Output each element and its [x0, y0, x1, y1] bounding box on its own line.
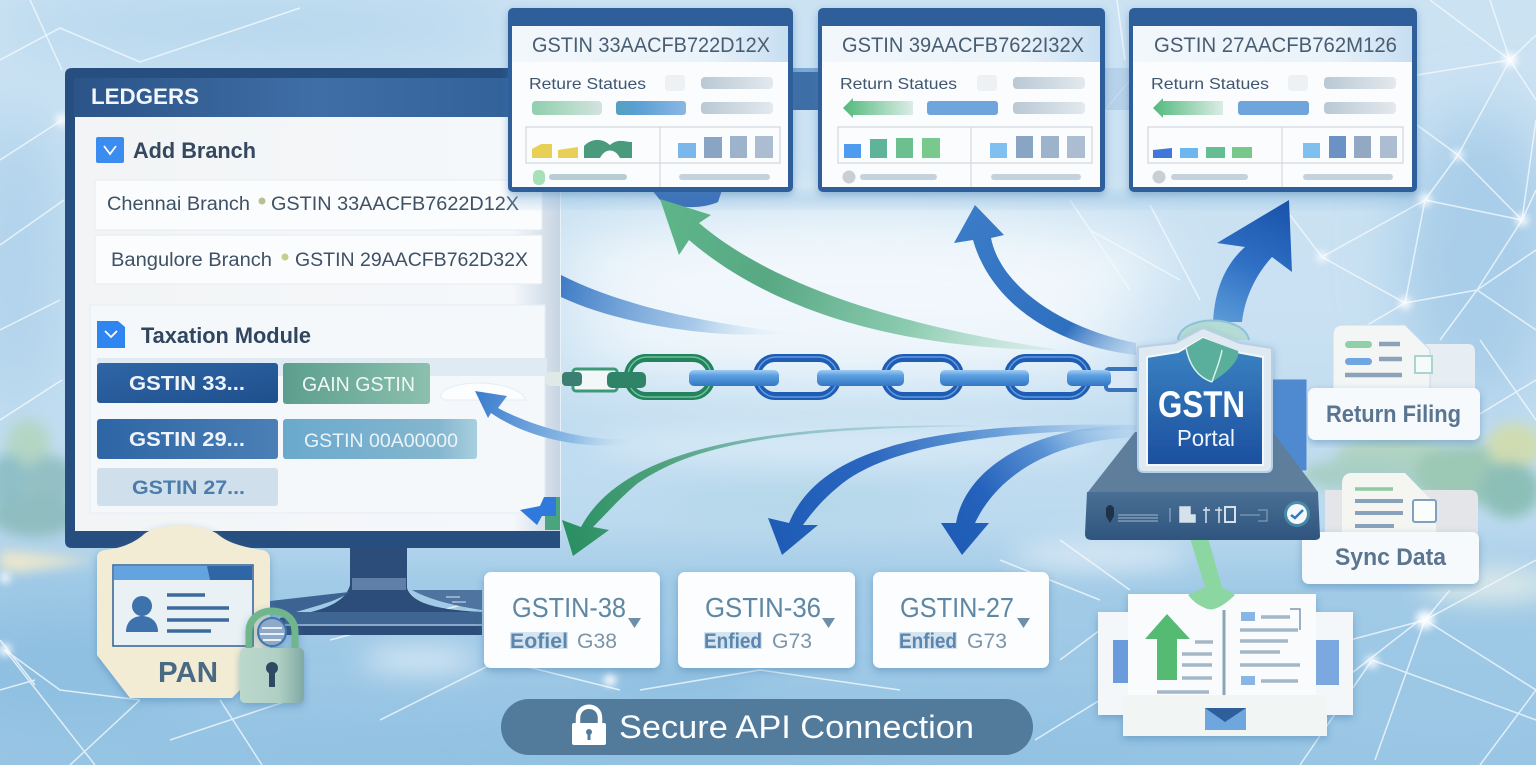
status check	[1284, 501, 1310, 527]
GSTIN-27 tile: GSTIN-27	[900, 592, 1014, 623]
button: GSTIN 33: GSTIN 33...	[129, 373, 245, 395]
return filing stack	[1308, 325, 1480, 440]
folder back	[1420, 344, 1475, 395]
bottom documents stack	[1098, 594, 1353, 736]
shield top ring	[1178, 320, 1249, 340]
icon: envelope	[1205, 708, 1246, 730]
chennai branch row	[95, 180, 542, 230]
tray	[1123, 695, 1327, 736]
status chips	[532, 75, 773, 115]
ledgers header	[74, 78, 564, 117]
GSTIN-36 tile: GSTIN-36	[705, 592, 821, 623]
PAN badge	[97, 526, 270, 698]
GSTIN-36 tile: G73	[772, 630, 812, 653]
card: GSTIN 27	[1129, 8, 1417, 192]
GSTIN-36 tile: Enfied	[704, 630, 762, 653]
card footer	[842, 170, 1081, 184]
arrow: blue down to GSTIN-27	[941, 425, 1136, 555]
arrow: green to first card	[660, 199, 1060, 350]
GSTIN-38 tile	[484, 572, 660, 668]
arrow: blue down to GSTIN-36	[768, 425, 1136, 555]
side panel behind shield	[1270, 379, 1307, 471]
thin connecting links	[573, 369, 1140, 391]
card title: GSTIN 33AACFB722D12X	[532, 34, 770, 57]
card title: GSTIN 27AACFB762M126	[1154, 34, 1397, 57]
small cloud	[440, 383, 526, 400]
button: GAIN GSTIN: GAIN GSTIN	[302, 374, 415, 396]
shield	[1138, 328, 1272, 472]
card: GSTIN 39	[818, 8, 1105, 192]
padlock icon	[240, 611, 304, 703]
arrow: blue to second card	[954, 205, 1136, 355]
button: GSTIN 27: GSTIN 27...	[132, 478, 245, 499]
card status: Reture Statues	[529, 76, 646, 93]
arrow: green down to GSTIN-38	[562, 426, 989, 556]
GSTIN-38 tile: GSTIN-38	[512, 592, 626, 623]
label: Sync Data	[1335, 544, 1447, 571]
label	[1302, 532, 1479, 584]
document	[1342, 473, 1436, 535]
open document	[1128, 594, 1316, 699]
ledgers header: LEDGERS	[91, 84, 199, 109]
monitor stand	[270, 548, 482, 635]
GSTN portal server	[1085, 320, 1320, 540]
GSTIN-27 tile: G73	[967, 630, 1007, 653]
mini charts	[1148, 127, 1403, 187]
button: GSTIN 27	[97, 468, 278, 506]
sync data stack	[1302, 473, 1479, 584]
label: Return Filing	[1326, 401, 1461, 428]
card status: Return Statues	[1151, 76, 1269, 93]
chennai branch row: GSTIN 33AACFB7622D12X	[271, 194, 519, 215]
icon: lock	[572, 707, 606, 745]
mini charts	[526, 127, 780, 187]
mini charts	[838, 127, 1092, 187]
monitor with ledgers screen	[65, 68, 564, 548]
card footer	[1152, 170, 1393, 184]
chennai branch row: Chennai Branch	[107, 194, 250, 215]
GSTN label: GSTN	[1158, 384, 1245, 425]
GSTIN-36 tile	[678, 572, 855, 668]
arrow: blue back to taxation module	[475, 391, 645, 445]
secure API connection pill	[501, 699, 1033, 755]
bangulore branch row	[95, 235, 542, 284]
add branch heading: Add Branch	[133, 138, 256, 163]
chain ovals	[628, 357, 1088, 397]
taxation module panel	[90, 305, 547, 513]
card title: GSTIN 39AACFB7622I32X	[842, 34, 1084, 57]
card: GSTIN 33	[508, 8, 793, 192]
GSTIN-38 tile: G38	[577, 630, 617, 653]
button: GSTIN 00A00000	[283, 419, 477, 459]
GSTIN-27 tile: Enfied	[899, 630, 957, 653]
bangulore branch row: Bangulore Branch	[111, 250, 272, 271]
card footer	[533, 170, 770, 185]
portal label: Portal	[1177, 425, 1235, 451]
band behind cards	[510, 68, 1415, 207]
monitor frame	[65, 68, 560, 548]
document	[1333, 325, 1432, 392]
taxation heading: Taxation Module	[141, 323, 311, 348]
status chips	[843, 75, 1085, 118]
server top	[1088, 432, 1318, 492]
secure API connection pill: Secure API Connection	[619, 709, 974, 745]
faded connector sweep from screen	[561, 275, 790, 335]
corner connector icon	[520, 497, 560, 530]
screen	[75, 117, 561, 531]
background hills and trees	[0, 419, 1536, 572]
button: GSTIN 29: GSTIN 29...	[129, 429, 245, 451]
green arrow to bottom documents	[1188, 538, 1235, 609]
PAN ID card	[113, 565, 253, 646]
chain bars	[546, 370, 1111, 388]
bangulore branch row: GSTIN 29AACFB762D32X	[295, 250, 528, 271]
GSTIN-27 tile	[873, 572, 1049, 668]
button: GSTIN 33	[97, 363, 278, 403]
status chips	[1153, 75, 1396, 118]
server front	[1085, 492, 1320, 540]
server indicators	[1106, 505, 1267, 523]
label	[1308, 388, 1480, 440]
PAN label: PAN	[158, 657, 218, 689]
chain link connector	[546, 357, 1140, 397]
folder back	[1325, 490, 1478, 540]
button: GSTIN 29	[97, 419, 278, 459]
GSTIN-38 tile: Eofiel	[510, 630, 568, 653]
card status: Return Statues	[840, 76, 957, 93]
arrow: blue to third card	[1213, 200, 1292, 322]
back sheets	[1098, 612, 1353, 715]
button: GSTIN 00A00000: GSTIN 00A00000	[304, 431, 458, 452]
button: GAIN GSTIN	[283, 363, 430, 404]
